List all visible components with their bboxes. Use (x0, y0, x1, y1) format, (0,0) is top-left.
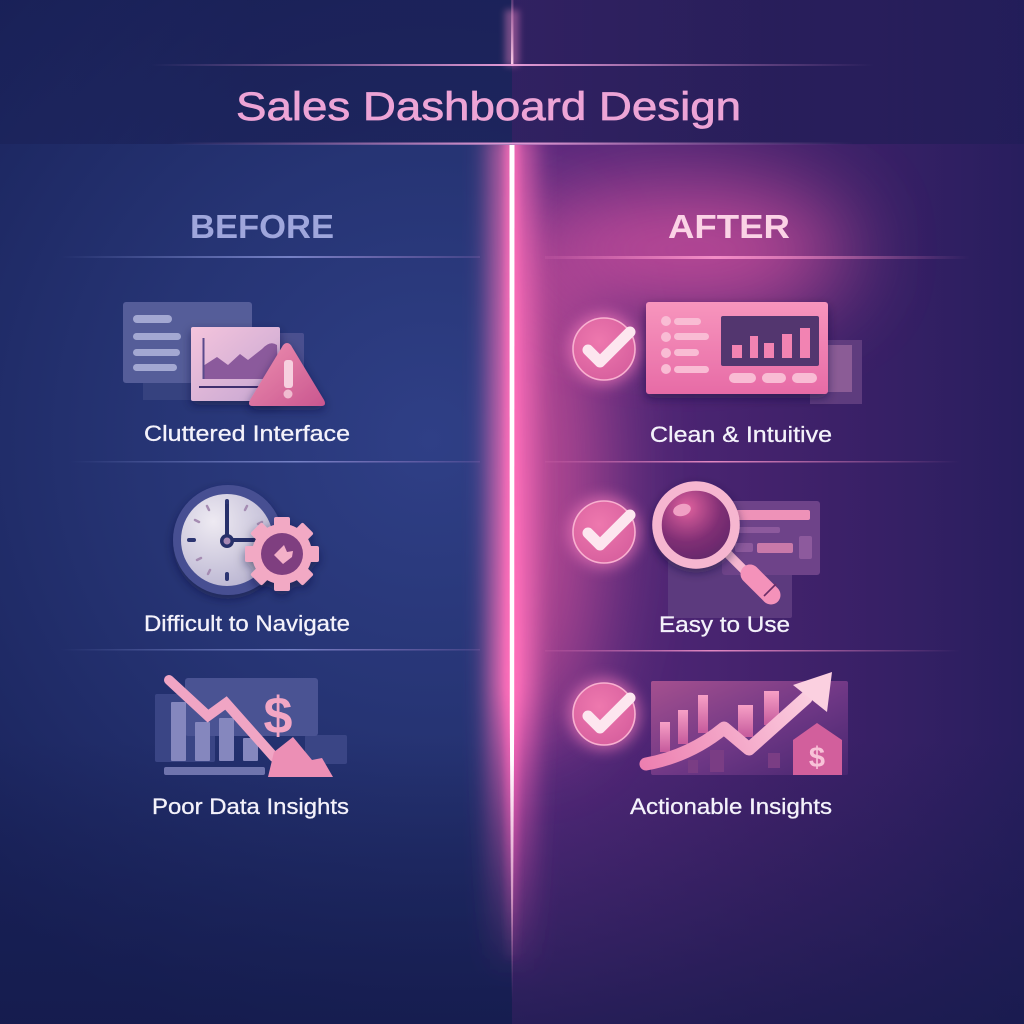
title band rules (150, 64, 874, 145)
section rules (60, 256, 970, 652)
icon: magnifier over panel (657, 486, 820, 618)
title band and top darkening (0, 0, 1024, 144)
heading: after: AFTER (668, 208, 790, 245)
label: clean and intuitive: Clean & Intuitive (650, 422, 832, 447)
pink wash on after side (460, 185, 850, 740)
label: actionable insights: Actionable Insights (630, 794, 832, 819)
bottom fade (0, 740, 1024, 1024)
background: after side (512, 0, 1024, 1024)
icon: cluttered interface (123, 302, 325, 406)
label: poor data insights: Poor Data Insights (152, 794, 349, 819)
icon: falling chart and dollar (155, 678, 347, 777)
icon: falling chart and dollar: $ (264, 687, 293, 745)
check badge 2 (568, 496, 640, 568)
label: easy to use: Easy to Use (659, 612, 790, 637)
background: before side (0, 0, 512, 1024)
check badge 1 (568, 313, 640, 385)
icon: rising chart and dollar tag (646, 672, 848, 775)
central glowing divider (490, 0, 534, 1000)
title: Sales Dashboard Design (236, 85, 741, 129)
label: difficult to navigate: Difficult to Navigate (144, 611, 350, 636)
icon: rising chart and dollar tag: $ (809, 742, 825, 774)
label: cluttered interface: Cluttered Interface (144, 421, 350, 446)
check badge 3 (568, 678, 640, 750)
icon: clock and gear (173, 485, 319, 595)
heading: before: BEFORE (190, 208, 334, 245)
icon: clean dashboard (646, 302, 862, 404)
